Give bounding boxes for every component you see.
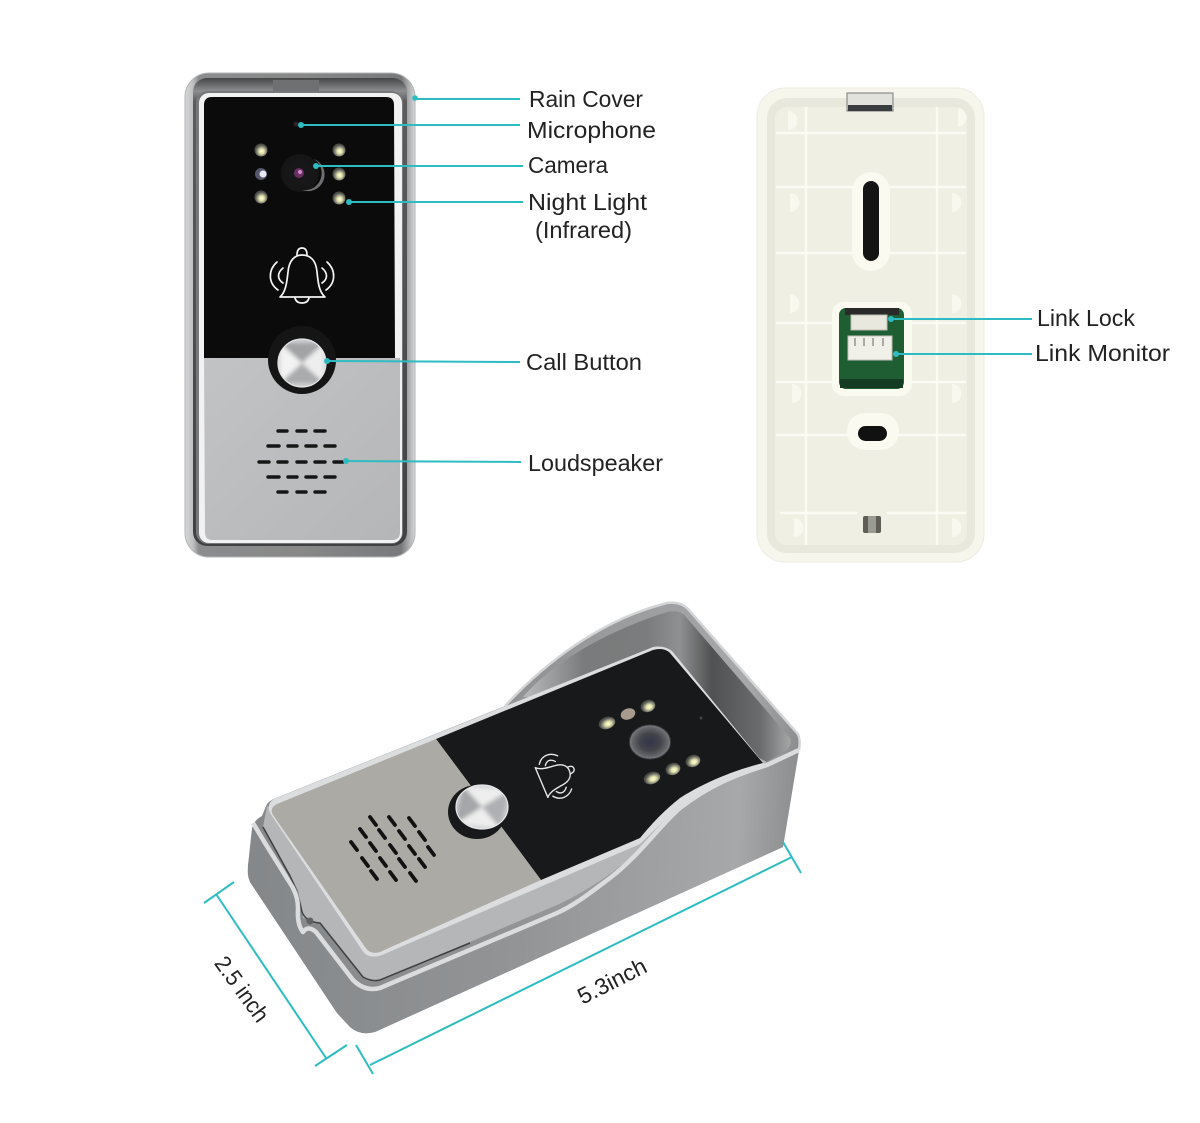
callout: Camera: Camera [528, 152, 608, 178]
dimension: 2.5 inch width: 2.5 inch [209, 951, 275, 1027]
callout: Loudspeaker [343, 450, 663, 476]
black upper panel [204, 97, 395, 358]
dimension: 2.5 inch width [204, 882, 347, 1066]
camera lens [281, 154, 325, 192]
callout: Link Monitor [893, 340, 1170, 366]
LED lights [254, 144, 346, 204]
silver faceplate [272, 739, 541, 953]
bell icon [270, 248, 334, 303]
silver lower panel [204, 358, 400, 540]
back view of mounting plate [757, 88, 984, 562]
call button [268, 326, 336, 394]
front wall of housing [248, 750, 799, 1033]
callout: Loudspeaker: Loudspeaker [528, 450, 663, 476]
callout: Link Lock [888, 305, 1135, 331]
black faceplate [436, 649, 763, 880]
callout: Rain Cover [412, 86, 643, 112]
front view of door station [185, 73, 415, 557]
hood rim highlight [505, 603, 800, 750]
screw tabs [788, 108, 966, 537]
angled perspective view of door station [248, 603, 800, 1033]
loudspeaker slots [259, 431, 343, 492]
callout: Night Light (Infrared): Night Light [528, 189, 648, 215]
bell icon [533, 747, 583, 803]
reinforcing ribs [776, 107, 966, 545]
camera lens [630, 725, 670, 759]
callout: Camera [313, 152, 608, 178]
plate frame [263, 700, 767, 981]
top tab [847, 93, 893, 111]
housing body [248, 603, 800, 1033]
callout: Rain Cover: Rain Cover [529, 86, 643, 112]
rain cover frame [185, 73, 415, 557]
callout: Microphone: Microphone [527, 117, 656, 143]
front rim swoosh [253, 750, 799, 989]
speaker slots [351, 817, 434, 881]
callout: Night Light (Infrared) [346, 189, 648, 243]
dimension: 5.3 inch length: 5.3inch [573, 953, 651, 1009]
hood interior [523, 611, 791, 763]
microphone hole [294, 122, 298, 126]
frame shadow line [263, 827, 470, 981]
callout: Call Button [324, 349, 642, 375]
LED lights [597, 698, 702, 787]
callout: Night Light (Infrared): (Infrared) [535, 217, 632, 243]
bottom screw [863, 516, 881, 533]
microphone hole [700, 716, 702, 720]
screw hole [306, 918, 314, 924]
callout: Link Monitor: Link Monitor [1035, 340, 1170, 366]
callout: Call Button: Call Button [526, 349, 642, 375]
keyhole slot [852, 172, 890, 271]
callout: Link Lock: Link Lock [1037, 305, 1135, 331]
circuit board opening [832, 302, 912, 396]
lower mounting hole [847, 413, 899, 450]
plate rim [269, 646, 765, 957]
dimension: 5.3 inch length [356, 842, 801, 1074]
call button [448, 785, 510, 839]
callout: Microphone [298, 117, 656, 143]
